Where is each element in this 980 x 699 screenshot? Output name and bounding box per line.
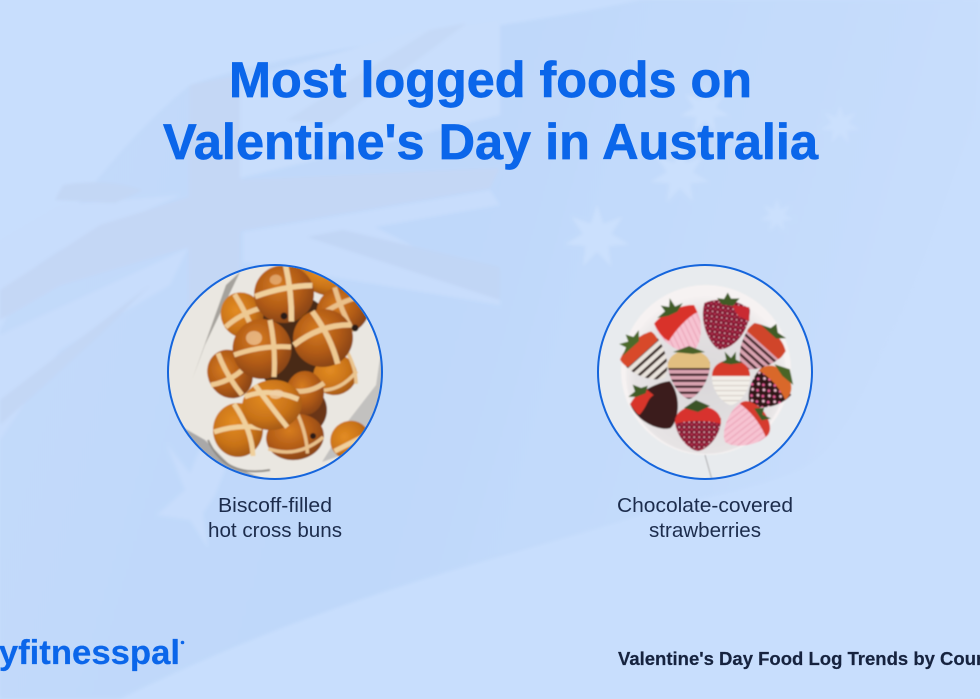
title: Most logged foods on (229, 52, 752, 108)
caption: strawberries (617, 494, 793, 542)
caption: hot cross buns (208, 494, 342, 542)
caption: hot cross buns: Biscoff-filled (218, 494, 332, 517)
title: Valentine's Day in Australia (163, 114, 819, 170)
caption: hot cross buns: hot cross buns (208, 519, 342, 542)
food photo: chocolate-covered strawberries (595, 262, 815, 482)
caption: strawberries: strawberries (649, 519, 761, 542)
food photo: hot cross buns (165, 254, 385, 490)
caption: strawberries: Chocolate-covered (617, 494, 793, 517)
title (163, 52, 819, 170)
